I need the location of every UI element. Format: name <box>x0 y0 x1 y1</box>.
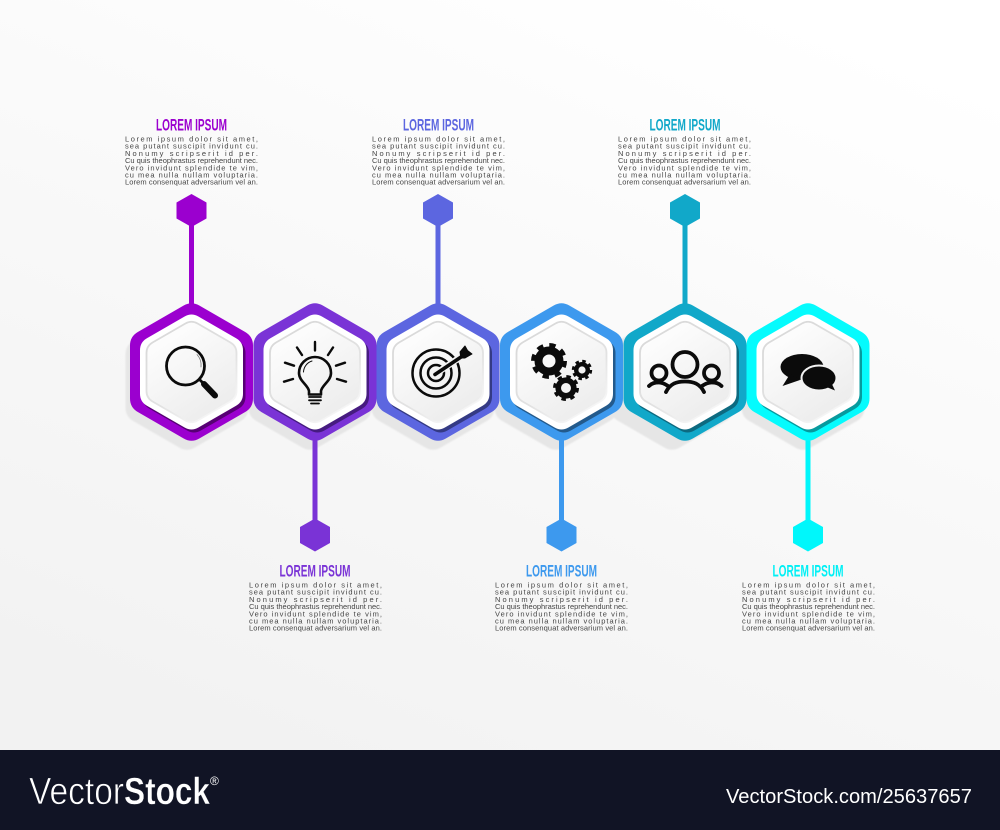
callout text: step 2: Vero invidunt splendide te vim, <box>249 609 382 618</box>
connector: step 6 <box>793 435 823 552</box>
callout text: step 2: Cu quis theophrastus reprehendunt nec. <box>249 602 382 611</box>
callout text: step 2: LOREM IPSUM <box>280 562 350 580</box>
callout text: step 1: sea putant suscipit invidunt cu. <box>125 142 258 151</box>
callout text: step 5: Lorem ipsum dolor sit amet, <box>618 134 751 144</box>
callout text: step 4: Lorem consenquat adversarium vel an. <box>495 624 628 633</box>
callout text: step 4: LOREM IPSUM <box>526 562 597 580</box>
logo: VectorStock <box>29 771 219 813</box>
callout text: step 3: Nonumy scripserit id per. <box>372 149 505 158</box>
step 4: gears hexagon <box>495 303 628 633</box>
callout text: step 6: LOREM IPSUM <box>772 562 844 580</box>
callout text: step 1: Lorem consenquat adversarium vel an. <box>125 178 258 187</box>
callout text: step 5: Cu quis theophrastus reprehendunt nec. <box>618 156 751 165</box>
callout text: step 5: Nonumy scripserit id per. <box>618 149 751 158</box>
callout text: step 6: sea putant suscipit invidunt cu. <box>742 588 875 597</box>
step 5: people hexagon <box>618 116 751 441</box>
callout text: step 6: cu mea nulla nullam voluptaria. <box>742 616 875 626</box>
callout text: step 4: sea putant suscipit invidunt cu. <box>495 588 628 597</box>
icon: light bulb <box>284 342 346 404</box>
connector: step 2 <box>300 435 330 552</box>
callout text: step 5: cu mea nulla nullam voluptaria. <box>618 170 751 180</box>
step 1: magnifier hexagon <box>125 116 258 441</box>
callout text: step 2: Lorem ipsum dolor sit amet, <box>249 580 382 590</box>
callout text: step 4: cu mea nulla nullam voluptaria. <box>495 616 628 626</box>
callout text: step 6: Nonumy scripserit id per. <box>742 595 875 604</box>
callout text: step 6 <box>742 562 875 633</box>
icon: target with arrow <box>412 346 472 396</box>
callout text: step 1: cu mea nulla nullam voluptaria. <box>125 170 258 180</box>
callout text: step 6: Vero invidunt splendide te vim, <box>742 609 875 618</box>
hexagon badge: step 5 <box>624 303 746 441</box>
connector: step 3 <box>423 194 453 310</box>
logo: VectorStock: ® <box>210 774 219 788</box>
icon: speech bubbles <box>780 354 836 390</box>
step 2: light bulb hexagon <box>249 303 382 633</box>
callout text: step 2: Lorem consenquat adversarium vel an. <box>249 624 382 633</box>
step 6: speech bubbles hexagon <box>742 303 875 633</box>
callout text: step 3: Lorem consenquat adversarium vel an. <box>372 178 505 187</box>
connector: step 4 <box>546 435 576 552</box>
callout text: step 6: Lorem ipsum dolor sit amet, <box>742 580 875 590</box>
callout text: step 2 <box>249 562 382 633</box>
callout text: step 3: LOREM IPSUM <box>403 116 474 134</box>
callout text: step 2: sea putant suscipit invidunt cu. <box>249 588 382 597</box>
hexagon drop shadows <box>126 312 864 450</box>
callout text: step 3: sea putant suscipit invidunt cu. <box>372 142 505 151</box>
callout text: step 4 <box>495 562 628 633</box>
logo: VectorStock: Vector <box>29 771 124 813</box>
callout text: step 1: LOREM IPSUM <box>156 116 227 134</box>
icon: gears <box>534 346 590 399</box>
hexagon badge: step 1 <box>130 303 253 441</box>
callout text: step 5: Vero invidunt splendide te vim, <box>618 163 751 172</box>
callout text: step 2: cu mea nulla nullam voluptaria. <box>249 616 382 626</box>
icon: people group <box>649 352 722 392</box>
hexagon badge: step 2 <box>254 303 376 441</box>
icon: magnifier <box>166 347 215 396</box>
hexagon badge: step 6 <box>746 303 870 441</box>
callout text: step 5: sea putant suscipit invidunt cu. <box>618 142 751 151</box>
callout text: step 3 <box>372 116 505 187</box>
callout text: step 4: Lorem ipsum dolor sit amet, <box>495 580 628 590</box>
callout text: step 1: Cu quis theophrastus reprehendunt nec. <box>125 156 258 165</box>
callout text: step 1: Vero invidunt splendide te vim, <box>125 163 258 172</box>
callout text: step 1 <box>125 116 258 187</box>
callout text: step 4: Cu quis theophrastus reprehendunt nec. <box>495 602 628 611</box>
callout text: step 6: Lorem consenquat adversarium vel an. <box>742 624 875 633</box>
callout text: step 2: Nonumy scripserit id per. <box>249 595 382 604</box>
connector: step 5 <box>670 194 700 310</box>
hexagon badge: step 4 <box>500 303 623 441</box>
footer bar <box>0 750 1000 830</box>
callout text: step 3: cu mea nulla nullam voluptaria. <box>372 170 505 180</box>
callout text: step 3: Cu quis theophrastus reprehendunt nec. <box>372 156 505 165</box>
logo: VectorStock: Stock <box>124 771 211 813</box>
callout text: step 1: Lorem ipsum dolor sit amet, <box>125 134 258 144</box>
hexagon badge: step 3 <box>376 303 500 441</box>
image id text: VectorStock.com/25637657 <box>726 786 972 808</box>
step 3: target hexagon <box>372 116 505 441</box>
callout text: step 3: Lorem ipsum dolor sit amet, <box>372 134 505 144</box>
callout text: step 5 <box>618 116 751 187</box>
callout text: step 4: Nonumy scripserit id per. <box>495 595 628 604</box>
callout text: step 1: Nonumy scripserit id per. <box>125 149 258 158</box>
callout text: step 4: Vero invidunt splendide te vim, <box>495 609 628 618</box>
callout text: step 6: Cu quis theophrastus reprehendunt nec. <box>742 602 875 611</box>
connector: step 1 <box>176 194 206 310</box>
callout text: step 5: LOREM IPSUM <box>650 116 720 134</box>
callout text: step 3: Vero invidunt splendide te vim, <box>372 163 505 172</box>
callout text: step 5: Lorem consenquat adversarium vel an. <box>618 178 751 187</box>
